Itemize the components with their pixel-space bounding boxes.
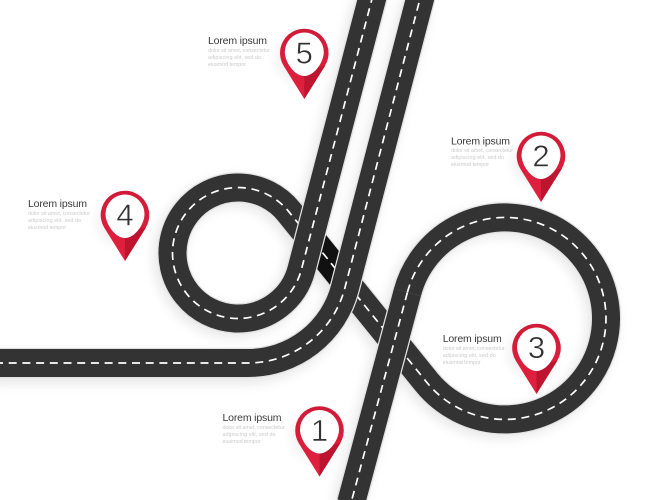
step 4 text: adipiscing elit, sed do — [28, 218, 81, 224]
pin 5: 5 — [296, 36, 313, 70]
pin 1 — [292, 406, 344, 476]
road: looping route — [173, 0, 606, 500]
step 3 text: adipiscing elit, sed do — [443, 353, 496, 359]
step 2 text: Lorem ipsum — [451, 136, 510, 148]
step 2 text: eiusmod tempor — [451, 162, 489, 168]
step 2 text — [451, 136, 513, 168]
step 3 text: eiusmod tempor — [443, 360, 481, 366]
step 1 text: eiusmod tempor — [222, 439, 261, 445]
step 1 text: Lorem ipsum — [222, 412, 282, 424]
step 4 text: Lorem ipsum — [28, 198, 87, 210]
step 1 text — [222, 412, 285, 445]
pin 1: 1 — [311, 413, 328, 448]
step 5 text: Lorem ipsum — [208, 35, 267, 47]
pin 2 — [513, 132, 565, 202]
step 5 text: dolor sit amet, consectetur — [208, 48, 270, 54]
step 2 text: dolor sit amet, consectetur — [451, 148, 513, 154]
step 3 text: Lorem ipsum — [443, 333, 502, 345]
step 4 text: eiusmod tempor — [28, 225, 66, 231]
underpass: dark road segment — [306, 233, 350, 287]
pin 4: 4 — [116, 198, 134, 232]
step 1 text: adipiscing elit, sed do — [222, 432, 276, 438]
pin 4 — [97, 191, 149, 261]
step 3 text: dolor sit amet, consectetur — [443, 346, 505, 352]
step 4 text — [28, 198, 90, 231]
step 5 text: adipiscing elit, sed do — [208, 55, 261, 61]
pin 3: 3 — [528, 330, 545, 365]
pin 2: 2 — [532, 138, 550, 174]
pin 5 — [276, 29, 329, 99]
step 4 text: dolor sit amet, consectetur — [28, 211, 90, 217]
road: loop leg to the top — [238, 0, 373, 318]
step 2 text: adipiscing elit, sed do — [451, 155, 504, 161]
road: straight route from left to top — [0, 0, 421, 363]
road: crossing over the diagonal near the bottom — [351, 292, 407, 500]
pin 3 — [508, 324, 561, 394]
step 1 text: dolor sit amet, consectetur — [222, 425, 285, 431]
step 5 text: eiusmod tempor — [208, 62, 246, 68]
step 3 text — [443, 333, 505, 366]
step 5 text — [208, 35, 270, 68]
